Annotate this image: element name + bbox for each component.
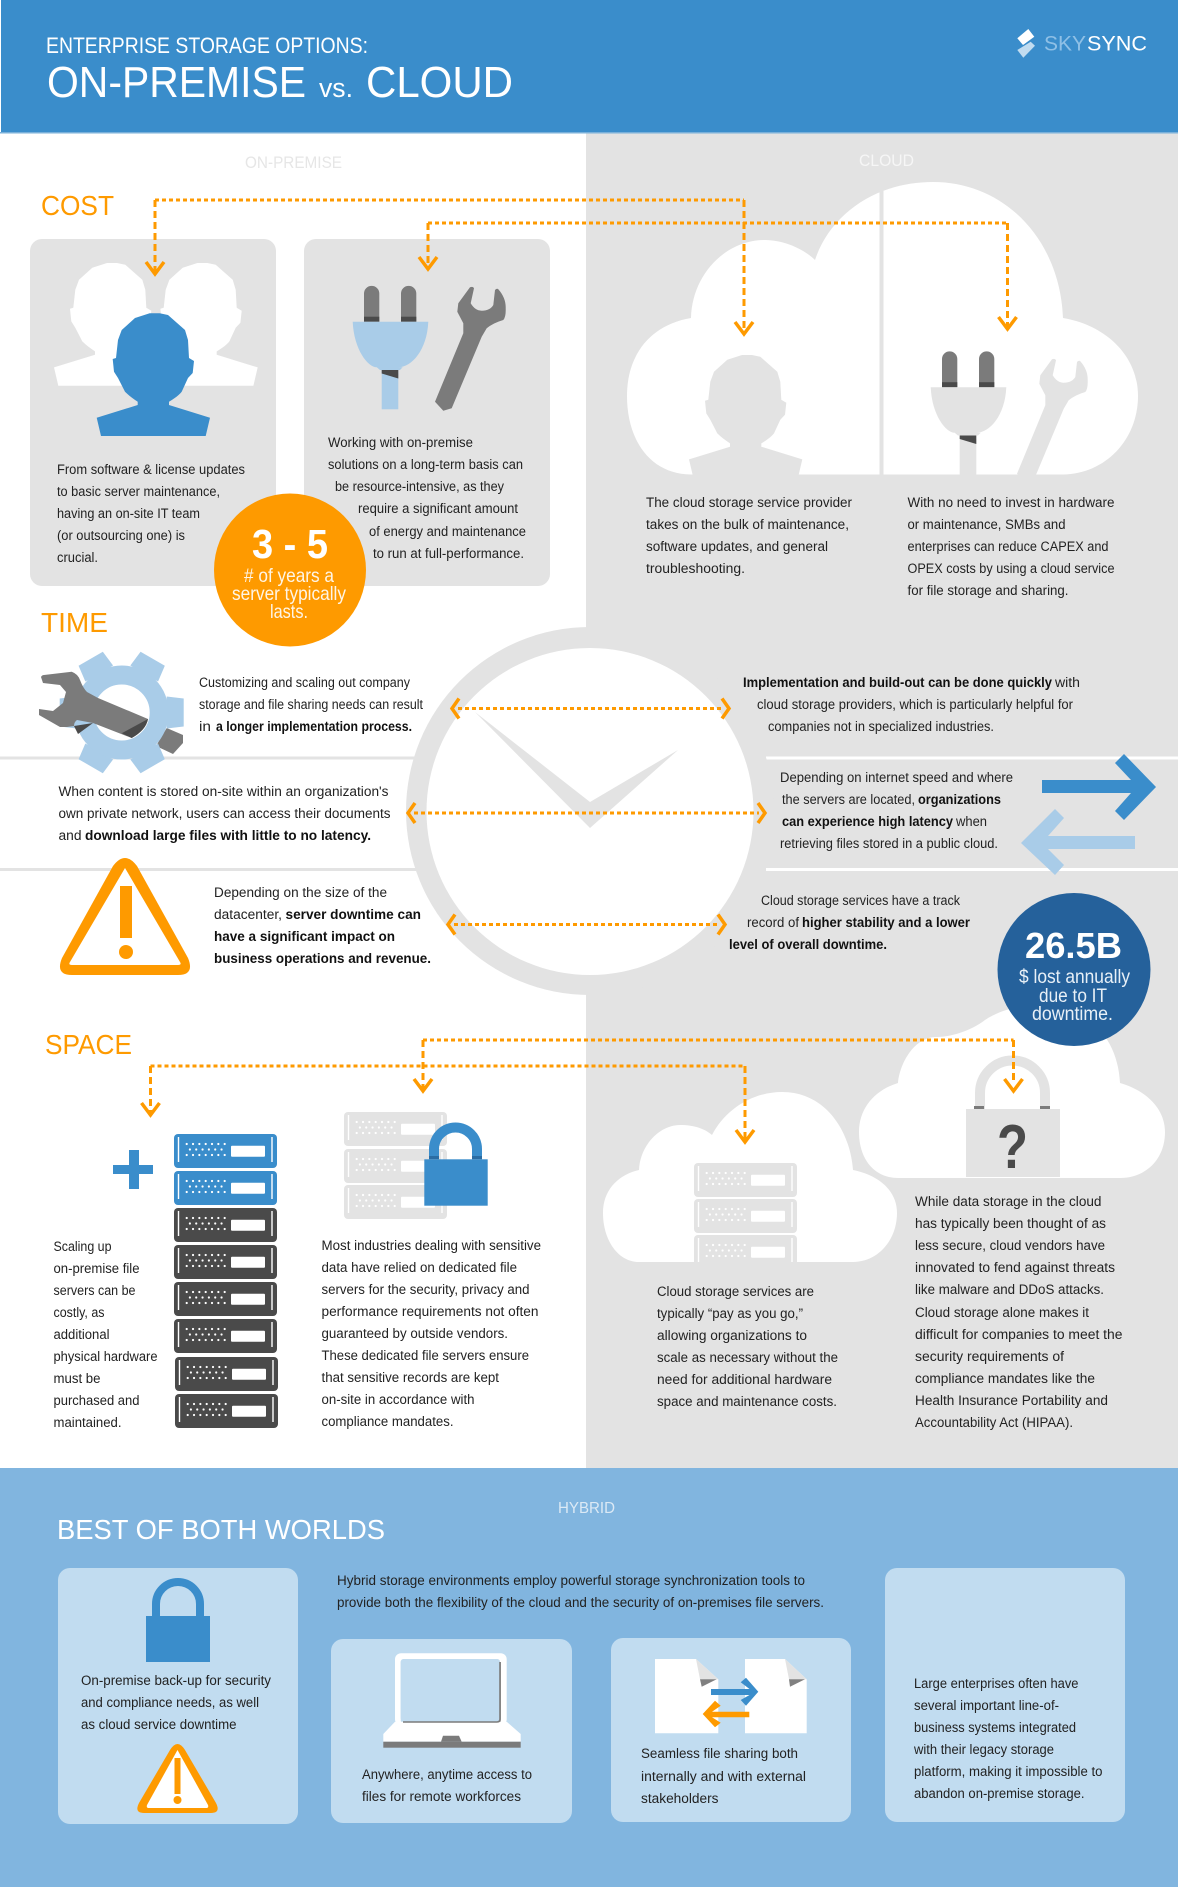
text: remote access: files for remote workforces bbox=[362, 1789, 521, 1804]
text: server downtime: have a significant impact on bbox=[214, 929, 395, 944]
icon: wrench bbox=[435, 287, 506, 411]
icon: blue arrow right bbox=[1042, 754, 1156, 820]
panel: on-premise energy and maintenance bbox=[304, 239, 550, 586]
text: team: (or outsourcing one) is bbox=[57, 528, 185, 543]
text: file sharing: internally and with external bbox=[641, 1769, 806, 1784]
text: cloud provider: takes on the bulk of maintenance, bbox=[646, 517, 849, 532]
text: cloud cost savings: With no need to invest in hardware bbox=[908, 495, 1114, 510]
cloud: pay as you go bbox=[603, 1092, 897, 1269]
text: cloud cost savings: enterprises can reduce CAPEX and bbox=[908, 539, 1108, 554]
text: higher stability bbox=[729, 893, 971, 952]
text: scaling up: costly, as bbox=[54, 1305, 105, 1320]
text: sensitive data: servers for the security, privacy and bbox=[322, 1282, 530, 1297]
heading: best of both worlds: BEST OF BOTH WORLDS bbox=[57, 1514, 385, 1545]
text: quick implementation bbox=[743, 675, 1080, 734]
text: long term: of energy and maintenance bbox=[369, 524, 526, 539]
text: hybrid intro: Hybrid storage environments employ powerful storage synchronization tools to bbox=[337, 1573, 805, 1588]
icon: small warning bbox=[137, 1744, 218, 1813]
text: cloud security: Accountability Act (HIPAA). bbox=[915, 1415, 1073, 1430]
logo: SkySync: SYNC bbox=[1087, 32, 1147, 56]
text: long term: to run at full-performance. bbox=[373, 546, 524, 561]
text: large enterprises: platform, making it impossible to bbox=[914, 1764, 1102, 1779]
text: server downtime: server downtime can bbox=[286, 907, 421, 922]
text: pay as you go: typically “pay as you go,” bbox=[657, 1306, 803, 1321]
text: sensitive data: guaranteed by outside vendors. bbox=[322, 1326, 508, 1341]
text: low latency: own private network, users can access their documents bbox=[58, 806, 391, 821]
title bbox=[47, 58, 513, 107]
text: large enterprises bbox=[913, 1676, 1102, 1801]
text: cloud security: While data storage in the cloud bbox=[915, 1194, 1102, 1209]
stat: 3-5 years: # of years a bbox=[244, 565, 334, 587]
title: CLOUD bbox=[366, 58, 513, 107]
text: large enterprises: Large enterprises often have bbox=[914, 1676, 1078, 1691]
column label: cloud: CLOUD bbox=[859, 151, 914, 170]
text: server downtime: Depending on the size of the bbox=[214, 885, 387, 900]
text: quick implementation: companies not in specialized industries. bbox=[768, 719, 994, 734]
text: hybrid intro bbox=[337, 1573, 824, 1610]
stat: 3-5 years: lasts. bbox=[270, 601, 308, 623]
heading: space: SPACE bbox=[45, 1029, 132, 1060]
text: low latency bbox=[58, 784, 391, 843]
text: back-up bbox=[81, 1673, 271, 1732]
text: pay as you go: need for additional hardware bbox=[657, 1372, 832, 1387]
icon: laptop bbox=[383, 1653, 521, 1748]
text: scaling up: must be bbox=[54, 1371, 100, 1386]
text: high latency: organizations bbox=[918, 792, 1001, 807]
text: cloud provider: troubleshooting. bbox=[646, 561, 745, 576]
text: higher stability: record of bbox=[747, 915, 799, 930]
text: scaling up: on-premise file bbox=[54, 1261, 140, 1276]
text: large enterprises: several important line-of- bbox=[914, 1698, 1059, 1713]
text: sensitive data: data have relied on dedicated file bbox=[322, 1260, 517, 1275]
icon: plus bbox=[113, 1150, 153, 1189]
text: scaling up bbox=[54, 1239, 158, 1430]
logo: SkySync bbox=[1017, 29, 1147, 58]
heading: cost: COST bbox=[41, 190, 114, 221]
text: cloud security: security requirements of bbox=[915, 1349, 1064, 1364]
text: long term: require a significant amount bbox=[358, 501, 518, 516]
text: back-up: and compliance needs, as well bbox=[81, 1695, 259, 1710]
text: cloud provider bbox=[646, 495, 852, 576]
icon: gear and wrench bbox=[39, 651, 184, 774]
text: cloud cost savings bbox=[908, 495, 1114, 598]
text: scaling up: Scaling up bbox=[54, 1239, 112, 1254]
header banner bbox=[0, 0, 1178, 134]
text: pay as you go: allowing organizations to bbox=[657, 1328, 807, 1343]
stat: 26.5B lost: downtime. bbox=[1032, 1003, 1113, 1025]
card: file sharing bbox=[611, 1638, 851, 1822]
text: cloud security: Health Insurance Portability and bbox=[915, 1393, 1108, 1408]
text: pay as you go: space and maintenance costs. bbox=[657, 1394, 837, 1409]
text: sensitive data bbox=[322, 1238, 541, 1429]
icon: IT team people bbox=[40, 263, 270, 436]
cloud: security bbox=[859, 1005, 1165, 1182]
panel: hybrid section bbox=[0, 1468, 1178, 1887]
icon: light arrow left bbox=[1021, 809, 1135, 875]
icon: blue lock bbox=[146, 1582, 210, 1662]
text: cloud provider: software updates, and general bbox=[646, 539, 828, 554]
panel: cloud column background bbox=[586, 133, 1178, 1468]
text: sensitive data: performance requirements not often bbox=[322, 1304, 538, 1319]
stat: 26.5B lost: 26.5B bbox=[1025, 925, 1122, 966]
text: low latency: When content is stored on-site within an organization's bbox=[58, 784, 389, 799]
text: longer implementation: Customizing and scaling out company bbox=[199, 675, 410, 690]
icon: lock with question mark: ? bbox=[997, 1113, 1028, 1182]
stat: 3-5 years bbox=[214, 494, 366, 646]
text: sensitive data: Most industries dealing with sensitive bbox=[322, 1238, 541, 1253]
text: higher stability: Cloud storage services have a track bbox=[761, 893, 960, 908]
text: high latency: retrieving files stored in a public cloud. bbox=[780, 836, 998, 851]
text: quick implementation: with bbox=[1054, 675, 1080, 690]
arrows: time connectors bbox=[408, 698, 765, 934]
text: team: having an on-site IT team bbox=[57, 506, 200, 521]
icon: cloud plug bbox=[931, 351, 1006, 480]
text: cloud security: has typically been thought of as bbox=[915, 1216, 1106, 1231]
text: cloud cost savings: for file storage and sharing. bbox=[908, 583, 1068, 598]
text: longer implementation: a longer implementation process. bbox=[216, 719, 412, 734]
text: higher stability: level of overall downtime. bbox=[729, 937, 887, 952]
icon: cloud wrench bbox=[1017, 359, 1088, 483]
card: remote access bbox=[331, 1639, 572, 1823]
text: long term: solutions on a long-term basis can bbox=[328, 457, 523, 472]
text: back-up: as cloud service downtime bbox=[81, 1717, 236, 1732]
text: remote access: Anywhere, anytime access to bbox=[362, 1767, 532, 1782]
arrows: cost connectors bbox=[146, 200, 1016, 334]
text: scaling up: servers can be bbox=[54, 1283, 136, 1298]
text: low latency: and bbox=[58, 828, 82, 843]
stat: 26.5B lost: $ lost annually bbox=[1019, 966, 1130, 988]
text: high latency: the servers are located, bbox=[782, 792, 915, 807]
text: server downtime: datacenter, bbox=[214, 907, 282, 922]
text: cloud security: compliance mandates like the bbox=[915, 1371, 1095, 1386]
text: high latency: Depending on internet speed and where bbox=[780, 770, 1013, 785]
text: pay as you go bbox=[657, 1284, 838, 1409]
text: back-up: On-premise back-up for security bbox=[81, 1673, 271, 1688]
text: team: From software & license updates bbox=[57, 462, 245, 477]
icon: documents and arrows bbox=[655, 1659, 807, 1733]
text: quick implementation: cloud storage providers, which is particularly helpful for bbox=[757, 697, 1073, 712]
text: large enterprises: with their legacy storage bbox=[913, 1742, 1054, 1757]
card: large enterprises bbox=[885, 1568, 1125, 1822]
text: cloud security: less secure, cloud vendors have bbox=[915, 1238, 1105, 1253]
text: file sharing: stakeholders bbox=[641, 1791, 719, 1806]
text: server downtime: business operations and revenue. bbox=[214, 951, 431, 966]
text: scaling up: maintained. bbox=[54, 1415, 122, 1430]
text: server downtime bbox=[214, 885, 431, 966]
text: cloud security: difficult for companies to meet the bbox=[915, 1327, 1122, 1342]
text: long term: be resource-intensive, as they bbox=[335, 479, 504, 494]
text: long term bbox=[328, 435, 526, 561]
text: sensitive data: that sensitive records are kept bbox=[322, 1370, 499, 1385]
text: sensitive data: compliance mandates. bbox=[322, 1414, 454, 1429]
icon: plug bbox=[353, 286, 428, 409]
text: cloud cost savings: or maintenance, SMBs and bbox=[908, 517, 1066, 532]
card: back-up bbox=[58, 1568, 298, 1824]
text: cloud security bbox=[915, 1194, 1122, 1430]
title: ON-PREMISE bbox=[47, 58, 306, 107]
stat: 3-5 years: 3 - 5 bbox=[252, 521, 328, 567]
text: large enterprises: business systems integrated bbox=[914, 1720, 1076, 1735]
text: low latency: download large files with little to no latency. bbox=[85, 828, 371, 843]
text: file sharing: Seamless file sharing both bbox=[641, 1746, 798, 1761]
heading: time: TIME bbox=[41, 607, 108, 638]
icon: server stack bbox=[113, 1134, 278, 1428]
text: remote access bbox=[362, 1767, 532, 1804]
stat: 3-5 years: server typically bbox=[232, 583, 346, 605]
stat: 26.5B lost bbox=[998, 893, 1150, 1046]
text: high latency: when bbox=[955, 814, 987, 829]
row dividers bbox=[0, 756, 1178, 871]
panel: on-premise IT team bbox=[30, 239, 276, 586]
label: hybrid: HYBRID bbox=[558, 1500, 615, 1517]
icon: cloud servers bbox=[694, 1163, 797, 1269]
arrows: space connectors bbox=[142, 1040, 1022, 1142]
cloud: cost bbox=[627, 180, 1138, 483]
text: team: to basic server maintenance, bbox=[57, 484, 220, 499]
text: sensitive data: These dedicated file servers ensure bbox=[322, 1348, 529, 1363]
text: pay as you go: scale as necessary without the bbox=[657, 1350, 838, 1365]
text: scaling up: additional bbox=[54, 1327, 110, 1342]
title: vs. bbox=[319, 73, 353, 103]
text: quick implementation: Implementation and build-out can be done quickly bbox=[743, 675, 1052, 690]
text: scaling up: purchased and bbox=[54, 1393, 140, 1408]
text: cloud security: like malware and DDoS attacks. bbox=[915, 1282, 1104, 1297]
icon: locked servers bbox=[344, 1112, 488, 1219]
icon: lock with question mark bbox=[966, 1060, 1060, 1182]
text: long term: Working with on-premise bbox=[328, 435, 473, 450]
logo: SkySync: SKY bbox=[1044, 32, 1086, 56]
text: sensitive data: on-site in accordance with bbox=[322, 1392, 474, 1407]
text: longer implementation bbox=[199, 675, 423, 734]
text: file sharing bbox=[641, 1746, 806, 1806]
column label: on-premise: ON-PREMISE bbox=[245, 153, 342, 172]
text: team: crucial. bbox=[57, 550, 98, 565]
text: higher stability: higher stability and a lower bbox=[802, 915, 971, 930]
text: longer implementation: in bbox=[199, 719, 211, 734]
text: high latency bbox=[780, 770, 1013, 851]
text: scaling up: physical hardware bbox=[54, 1349, 158, 1364]
text: high latency: can experience high latency bbox=[782, 814, 953, 829]
text: cloud security: innovated to fend against threats bbox=[915, 1260, 1115, 1275]
icon: provider person bbox=[689, 355, 802, 478]
stat: 26.5B lost: due to IT bbox=[1039, 985, 1107, 1007]
text: cloud security: Cloud storage alone makes it bbox=[915, 1305, 1089, 1320]
text: large enterprises: abandon on-premise storage. bbox=[914, 1786, 1084, 1801]
text: cloud provider: The cloud storage service provider bbox=[646, 495, 852, 510]
text: pay as you go: Cloud storage services are bbox=[657, 1284, 814, 1299]
text: team bbox=[57, 462, 245, 565]
text: hybrid intro: provide both the flexibility of the cloud and the security of on-premises file servers. bbox=[337, 1595, 824, 1610]
text: cloud cost savings: OPEX costs by using a cloud service bbox=[908, 561, 1114, 576]
text: longer implementation: storage and file sharing needs can result bbox=[199, 697, 423, 712]
icon: warning triangle bbox=[60, 858, 190, 975]
subtitle: ENTERPRISE STORAGE OPTIONS: bbox=[46, 33, 368, 58]
icon: clock bbox=[406, 627, 774, 995]
